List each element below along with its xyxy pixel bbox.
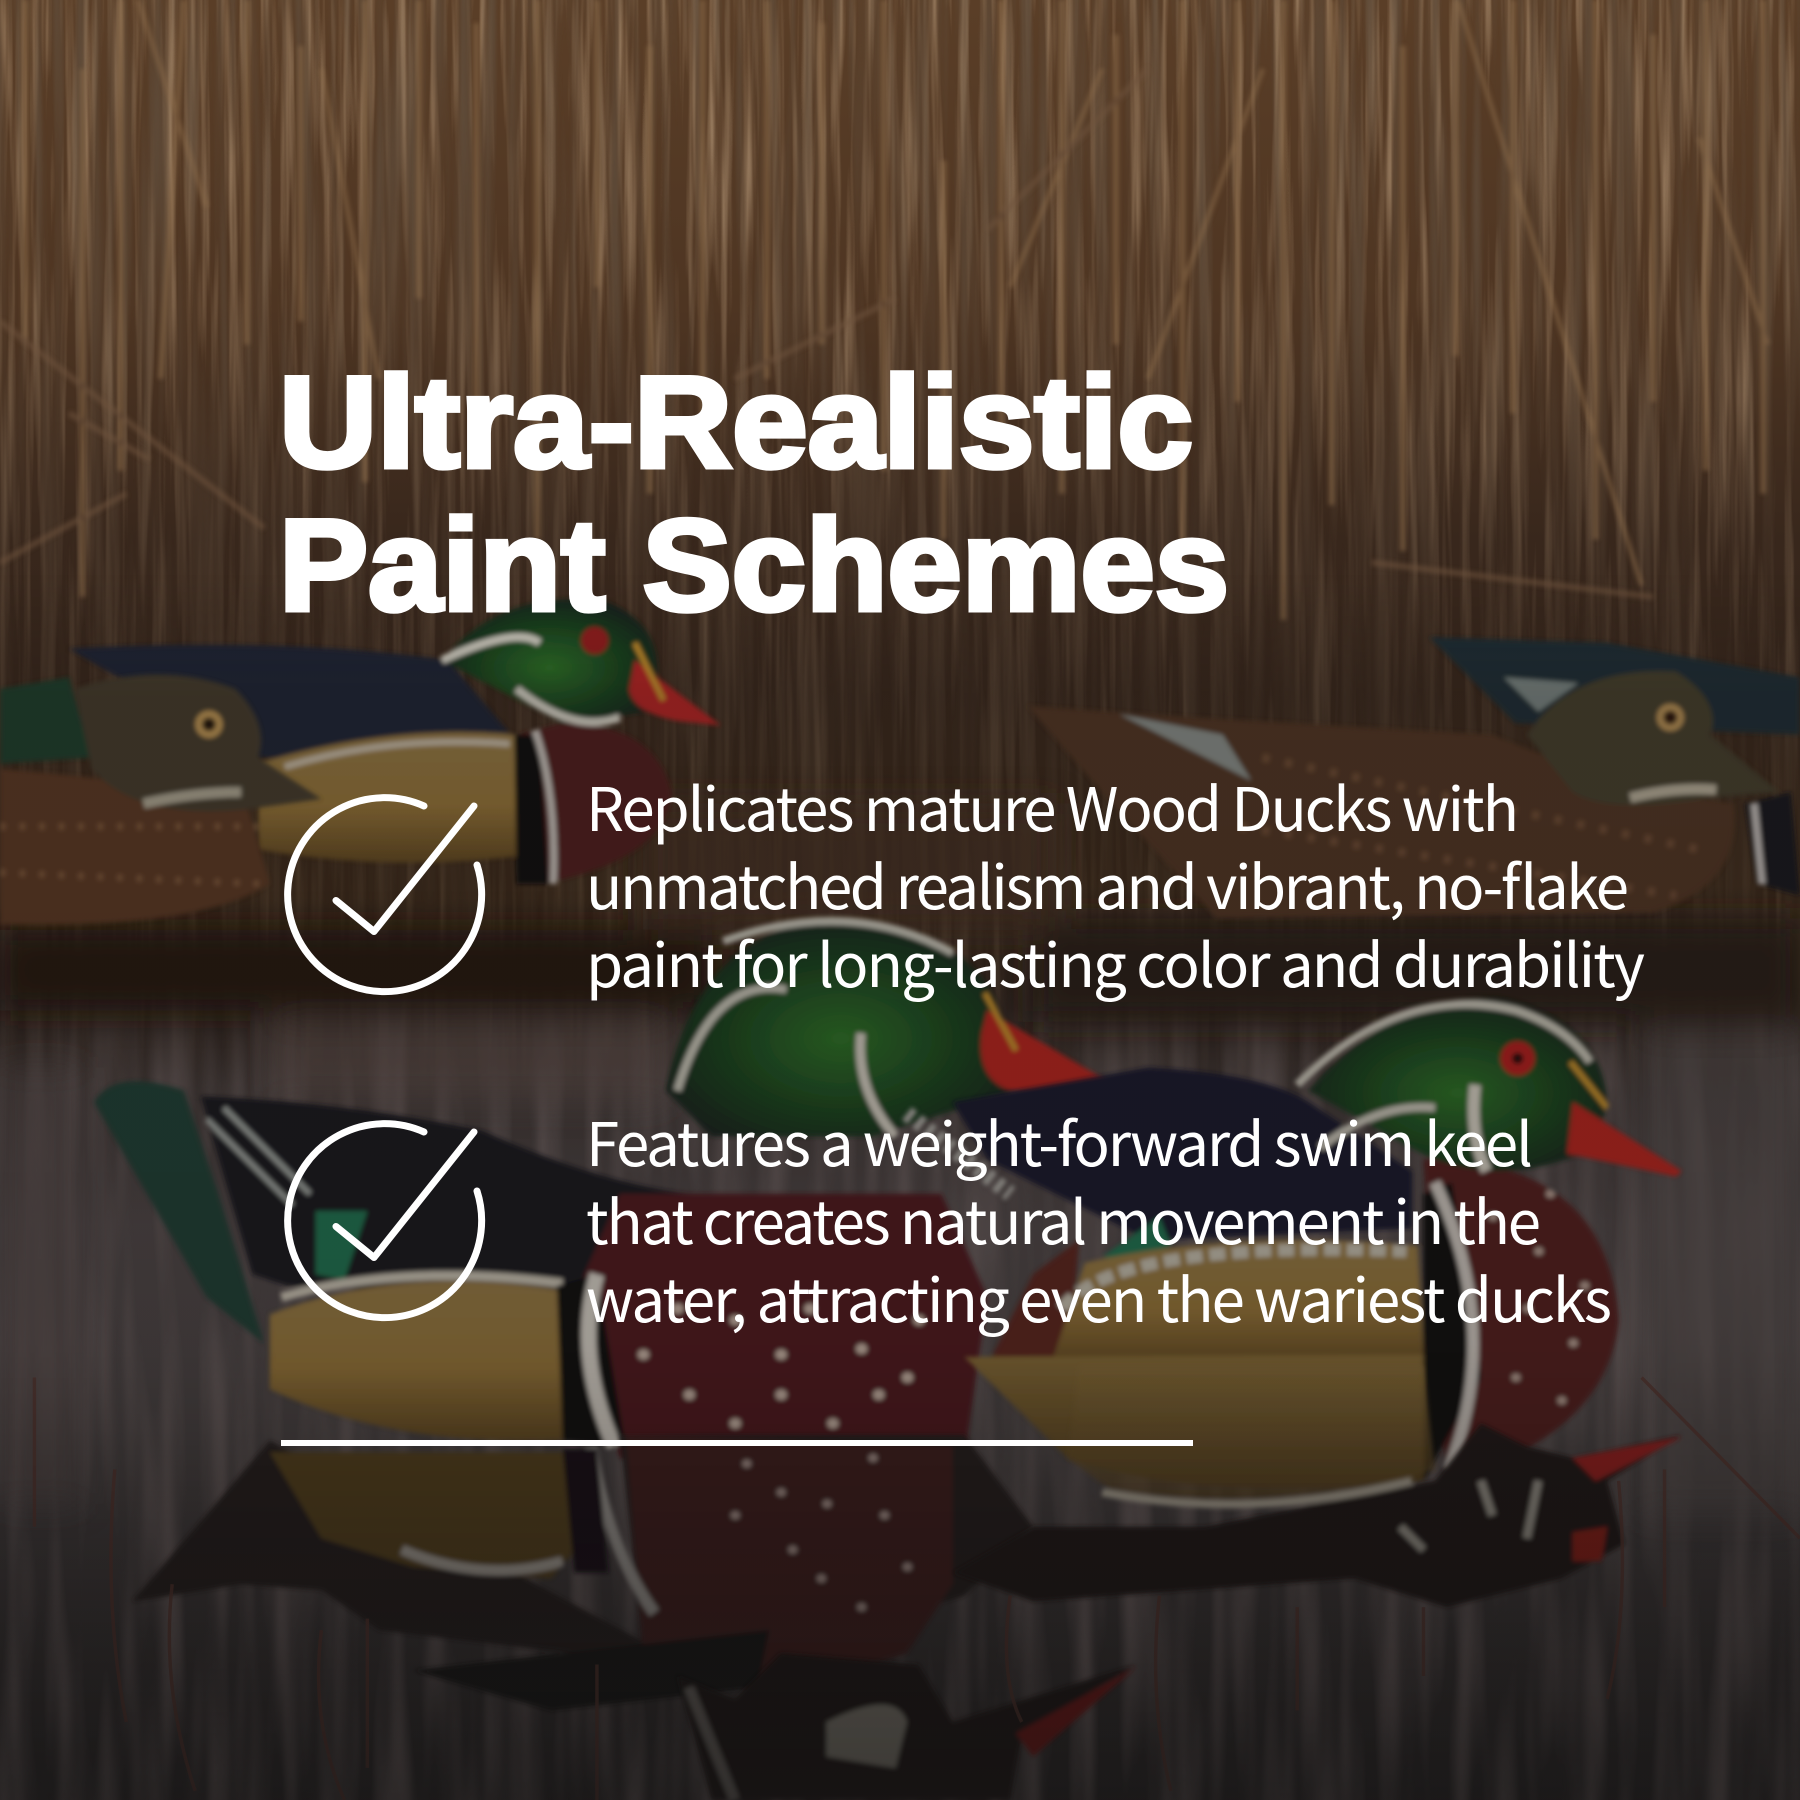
duck: front-left drake <box>94 1081 987 1458</box>
duck: right drake <box>907 998 1682 1489</box>
reflection of the right drake <box>953 1366 1682 1607</box>
icon: check circle 1 <box>288 798 482 992</box>
dark band behind the first row of ducks <box>0 804 1800 1515</box>
text block: benefit 2 <box>586 1097 1612 1340</box>
text block: benefit 2: Features a weight-forward swim keel <box>586 1097 1533 1184</box>
duck: drake upper left <box>69 599 721 884</box>
text block: benefit 1 <box>586 762 1645 1005</box>
text block: benefit 1: unmatched realism and vibrant, no-flake <box>586 840 1629 927</box>
divider line <box>281 1440 1193 1446</box>
duck: hen upper right <box>1027 637 1800 918</box>
title <box>279 349 1229 638</box>
duck: hen upper left <box>0 674 321 925</box>
text block: benefit 2: water, attracting even the wariest ducks <box>586 1253 1612 1340</box>
reflection of the front-left drake <box>132 1435 1033 1710</box>
title: Paint Schemes <box>279 492 1229 638</box>
text block: benefit 1: paint for long-lasting color and durability <box>586 918 1645 1005</box>
text block: benefit 2: that creates natural movement in the <box>586 1175 1541 1262</box>
duck: sleeping drake centre <box>666 918 1114 1136</box>
title: Ultra-Realistic <box>279 349 1193 495</box>
icon: check circle 2 <box>288 1124 482 1318</box>
reeds <box>0 0 1768 620</box>
reflection of the centre head <box>677 1653 1136 1800</box>
text block: benefit 1: Replicates mature Wood Ducks with <box>586 762 1519 849</box>
water reflections of reeds <box>34 1378 1800 1800</box>
